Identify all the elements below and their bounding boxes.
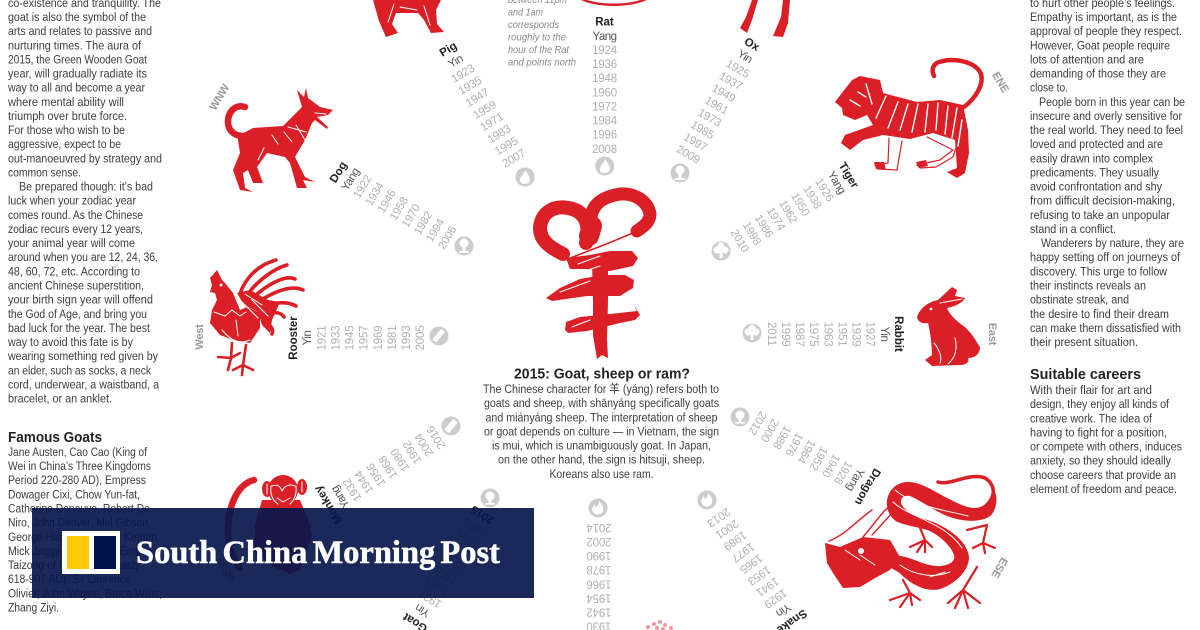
spoke: Monkey: 1932 [341,476,365,503]
spoke: Goat: 1931 [417,586,444,610]
text block: suitable careers: creative work. The idea of [1030,411,1152,425]
right column: personality text: predicaments. They usually [1030,165,1160,179]
icon: wood element, Tiger [712,242,730,260]
icon: metal element, Rooster [430,326,448,346]
spoke: Pig: 1971 [478,111,506,134]
spoke: Rat: Rat [595,17,614,29]
spoke: Tiger: 1998 [740,220,763,247]
right column: personality text: close to. [1030,81,1068,95]
right column: personality text: lots of attention and are [1030,52,1144,66]
note: hour of the Rat [508,0,576,68]
spoke: Tiger: 1974 [764,205,787,234]
spoke: Ox: 1973 [695,107,723,130]
spoke: Goat: 2003 [462,515,489,538]
spoke: Rooster: 1933 [330,326,342,350]
spoke: Horse [583,521,615,630]
text block: famous goats list [8,445,162,614]
left column: goat year text: cord, underwear, a waistband, a [8,377,159,391]
left column: goat year text: 48, 60, 72, etc. According to [8,264,140,278]
icon: earth element, Goat [480,488,500,508]
spoke: Dog: 1934 [364,180,387,208]
text block: suitable careers: anxiety, so they should ideally [1030,454,1172,468]
note: hour of the Rat: corresponds [508,19,560,31]
spoke: Rabbit: 1939 [850,322,862,346]
spoke: Pig: 1959 [471,99,499,122]
spoke: Rat: 1972 [592,102,617,114]
spoke: Rat: 1960 [592,87,617,99]
spoke: Goat [401,502,497,630]
spoke: Horse: 1990 [587,549,611,561]
icon: fire element, Snake [698,490,716,510]
spoke: Dog: Yang [340,166,362,193]
spoke: Dragon: 1928 [831,459,854,486]
spoke: Pig: Pig [438,40,459,60]
spoke: Monkey: 1968 [377,453,400,481]
right column: personality text: happy setting off on journeys of [1030,250,1180,264]
left column: goat year text: ancient Chinese superstition, [8,278,144,292]
spoke: Tiger [727,160,861,257]
text block: suitable careers: With their flair for art and [1030,383,1152,397]
spoke: Rabbit [765,316,904,352]
animal: Rooster [210,260,303,375]
left column: goat year text: comes round. As the Chinese [8,208,143,222]
animal: Pig [373,0,444,37]
spoke: Snake: 2013 [705,505,732,529]
spoke: Snake: 1953 [745,563,773,587]
left column: goat year text: year, will gradually radiate its [8,66,147,80]
spoke: Snake: 1929 [762,586,789,610]
left column: goat year text: For those who wish to be [8,123,125,137]
spoke: Monkey: Monkey [312,483,345,526]
spoke: Dog: 2006 [436,224,459,252]
spoke: Snake: 1965 [737,551,764,575]
spoke: Rat [592,17,618,156]
text block: famous goats list: Jane Austen, Cao Cao (King of [8,445,147,459]
animal: Rabbit [917,287,980,366]
spoke: Snake: 1941 [754,574,781,598]
icon: wood element, Rabbit [742,324,762,342]
icon: water element, Rat [595,156,614,176]
spoke: Dragon: 2012 [746,409,768,437]
left column: goat year text: luck when your zodiac year [8,194,136,208]
spoke: Tiger: 1926 [812,176,835,204]
spoke: Tiger: 1962 [776,198,799,226]
spoke: Rooster: 1993 [401,326,413,350]
left column: goat year text: around when you are 12, 24, 36, [8,250,158,264]
spoke: Rooster: 1969 [373,326,385,350]
spoke: Dragon: 1952 [807,445,830,472]
compass: West: West [194,324,206,350]
spoke: Pig: Yin [446,53,465,71]
spoke: Goat: 1955 [432,563,459,586]
animal: Monkey [228,475,312,574]
spoke: Ox: 1997 [681,131,709,154]
text block: character explanation: is mui, which is unambiguously goat. In Japan, [492,438,711,452]
spoke: Rabbit: Rabbit [892,316,904,352]
right column: personality text: Empathy is important, as is the [1030,10,1177,24]
wordmark: South China Morning Post [136,535,500,571]
left column: goat year text: arts and relates to passive and [8,24,152,38]
spoke: Ox: 1937 [717,70,744,93]
note: hour of the Rat: hour of the Rat [508,44,570,56]
spoke: Dragon: 1940 [819,452,842,479]
logo [62,531,120,574]
right column: personality text: avoid confrontation and shy [1030,180,1163,194]
compass: ENE: ENE [989,70,1011,95]
icon: metal element, Monkey [442,416,460,436]
spoke: Dragon: Yang [844,466,866,493]
spoke: Ox [674,33,765,166]
text block: famous goats list: Mick Jagger, Li Shimin (Emperor [8,544,160,558]
note: hour of the Rat: and 1am [508,6,543,18]
spoke: Tiger: Tiger [836,160,861,191]
spoke: Horse: 1954 [586,592,611,604]
left column: goat year text: bad luck for the year. The best [8,321,150,335]
left column: goat year text: zodiac recurs every 12 years, [8,222,143,236]
right column: personality text: easily drawn into complex [1030,151,1154,165]
spoke: Snake: Yin [774,600,793,619]
spoke: Rat: 1984 [592,116,618,128]
compass: ESE: ESE [989,555,1010,580]
heading: Suitable careers: Suitable careers [1030,367,1141,383]
icon: earth element, Dragon [730,408,750,426]
text block: suitable careers: having to fight for a position, [1030,425,1167,439]
right column: personality text: their present situation. [1030,335,1138,349]
icon: water element, Pig [516,168,534,186]
spoke: Dragon: 1988 [770,423,793,451]
left column: goat year text: bracelet, or an anklet. [8,392,112,406]
spoke: Dragon: 1976 [782,430,805,458]
left column: goat year text: aggressive, expect to be [8,137,121,151]
text block: famous goats list: Olivier, John Wayne, Bruce Willis, [8,586,162,600]
text block: famous goats list: George Harrison, Buster Keaton, [8,530,160,544]
spoke: Ox: 1949 [710,82,737,105]
right column: personality text: loved and protected and are [1030,137,1163,151]
spoke: Ox: Ox [742,36,762,54]
animal: Horse fragment [646,620,673,630]
spoke: Horse: 1978 [587,563,611,575]
left column: goat year text: wearing something red given by [7,349,159,363]
spoke: Monkey: 1980 [389,446,412,473]
spoke: Rooster: 1981 [387,326,399,350]
text block: suitable careers: or compete with others, induces [1030,440,1182,454]
right column: personality text: can make them dissatisfied with [1030,321,1181,335]
spoke: Pig: 2007 [500,147,528,170]
spoke: Rabbit: 1963 [821,322,833,346]
text block: suitable careers: choose careers that provide an [1030,468,1176,482]
spoke: Goat: 1943 [424,575,452,598]
spoke: Rooster: 1945 [344,326,356,350]
spoke: Ox: 2009 [674,144,702,166]
banner: South China Morning Post [32,508,534,598]
spoke: Ox: 1961 [702,95,730,117]
right column: personality text: demanding of those they are [1030,66,1166,80]
left column: goat year text: 2015, the Green Wooden Goat [8,52,147,66]
icon: earth element, Ox [670,164,690,182]
spoke: Rat: 1924 [592,45,618,57]
spoke: Rooster: Rooster [288,316,300,360]
spoke: Rooster: 2005 [415,326,427,350]
icon: earth element, Dog [454,236,474,256]
spoke: Tiger: 1938 [800,184,823,211]
spoke: Snake: 1977 [729,540,756,564]
text block: suitable careers: design, they enjoy all kinds of [1030,397,1169,411]
left column: goat year text: nurturing times. The aura of [8,38,141,52]
spoke: Dog: 1922 [352,173,375,201]
right column: personality text: from difficult decision-making, [1030,194,1175,208]
text block: character explanation: The Chinese character for 羊 (yáng) refers both to [483,381,719,396]
spoke: Rat: 1996 [592,130,617,142]
spoke: Rat: 2008 [592,144,617,156]
left column: goat year text: your birth sign year will offend [8,293,153,307]
right column: personality text [1030,0,1185,349]
spoke: Rooster: Yin [302,331,314,345]
note: hour of the Rat: roughly to the [508,31,566,43]
text block: character explanation: and miányáng sheep. The interpretation of sheep [486,410,718,424]
compass: WSW: WSW [214,554,239,584]
spoke: Dog: Dog [328,160,350,185]
text block: character explanation [483,381,719,481]
spoke: Horse: 2014 [586,521,611,533]
spoke: Tiger: Yang [825,169,847,196]
spoke: Pig [435,38,528,170]
spoke: Rooster: 1921 [316,326,328,350]
right column: personality text: refusing to take an unpopular [1030,208,1170,222]
spoke: Pig: 1923 [449,63,477,86]
left column: goat year text [7,0,162,406]
spoke: Pig: 1947 [464,87,491,110]
spoke: Dog: 1970 [400,202,423,230]
spoke: Monkey: Yang [329,484,352,510]
spoke: Horse: 1942 [587,606,611,618]
spoke: Dog: 1982 [412,210,435,237]
compass: East: East [986,323,998,346]
spoke: Goat: 1967 [439,551,467,574]
note: hour of the Rat: and points north [508,56,576,68]
spoke: Monkey: 1944 [353,468,376,496]
left column: goat year text: your animal year will come [8,236,135,250]
text block: character explanation: or goat depends on culture — in Vietnam, the sign [484,424,719,438]
text block: famous goats list: Wei in China’s Three Kingdoms [8,459,151,473]
animal: Ox [740,0,790,37]
spoke: Rat: 1936 [592,59,617,71]
spoke: Goat: 1991 [454,527,482,550]
spoke: Dog: 1958 [388,195,411,223]
left column: goat year text: out-manoeuvred by strategy and [8,151,162,165]
spoke: Ox: 1925 [724,58,751,81]
spoke: Snake [701,502,809,630]
spoke: Monkey [312,415,453,526]
text block: character explanation: Koreans also use ram. [550,467,654,481]
compass: WNW: WNW [207,82,233,113]
left column: goat year text: triumph over brute force. [8,109,127,123]
spoke: Rat: 1948 [592,73,617,85]
left column: goat year text: the God of Age, and bring you [8,307,147,321]
spoke: Monkey: 1992 [401,438,424,466]
spoke: Rabbit: 1999 [779,322,791,346]
animal: Tiger [835,60,982,178]
spoke: Tiger: 1950 [788,191,811,218]
right column: personality text: the desire to find their dream [1030,307,1169,321]
spoke: Rabbit: 2011 [765,322,777,346]
animal: Dog [228,88,333,192]
text block: famous goats list: Zhang Ziyi. [8,600,59,614]
spoke: Rabbit: 1951 [836,322,848,346]
spoke: Monkey: 2016 [425,423,448,451]
spoke: Goat: 2015 [469,502,497,526]
spoke: Ox: Yin [735,48,754,66]
spoke: Dragon: 2000 [758,416,781,444]
text block: famous goats list: Catherine Deneuve, Robert De [8,502,150,516]
spoke: Tiger: 1986 [752,213,775,240]
spoke: Dog: 1994 [424,216,448,244]
spoke: Dragon [742,402,882,507]
text block: suitable careers [1030,383,1182,496]
spoke: Snake: 1989 [721,528,748,552]
spoke: Goat: Yin [414,601,432,619]
left column: goat year text: an elder, such as socks, a neck [8,363,152,377]
spoke: Rooster [288,316,427,360]
text block: famous goats list: Period 220-280 AD), Empress [8,473,146,487]
animal: Rat [580,0,648,5]
spoke: Goat: 1979 [447,539,474,562]
spoke: Snake: 2001 [713,517,740,541]
right column: personality text: stand in a conflict. [1030,222,1116,236]
spoke: Dragon: Dragon [852,466,882,507]
text block: famous goats list: Taizong of the Tang Dynasty [8,558,141,572]
spoke: Monkey: 2004 [413,430,436,458]
left column: goat year text: way to all and become a year [7,81,145,95]
spoke: Dog: 1946 [376,188,399,215]
left column: goat year text: goat is also the symbol of the [8,10,146,24]
text block: character explanation: goats and sheep, with shānyáng specifically goats [484,396,719,410]
right column: personality text: However, Goat people require [1030,38,1170,52]
heading: Famous Goats: Famous Goats [8,430,102,446]
spoke: Dragon: 1964 [794,437,817,466]
spoke: Rat: Yang [592,31,617,43]
calligraphy: yang character [540,194,650,359]
spoke: Monkey: 1956 [365,461,388,488]
spoke: Tiger: 2010 [728,227,751,255]
spoke: Pig: 1983 [486,123,513,146]
spoke: Pig: 1995 [493,135,520,158]
left column: goat year text: where mental ability will [7,95,124,109]
text block: famous goats list: 618-907 AD), Sir Laurence [8,572,131,586]
text block: famous goats list: Dowager Cixi, Chow Yun-fat, [8,487,140,501]
spoke: Rabbit: 1975 [807,322,819,346]
right column: personality text: obstinate streak, and [1030,293,1129,307]
text block: suitable careers: element of freedom and peace. [1030,482,1177,496]
right column: personality text: discovery. This urge to follow [1030,264,1167,278]
right column: personality text: their instincts reveals an [1030,278,1146,292]
text block: character explanation: on the other hand, the sign is hitsuji, sheep. [498,453,705,467]
spoke: Rabbit: 1927 [864,322,876,346]
spoke: Rabbit: Yin [878,327,890,341]
icon: fire element, Horse [588,498,608,518]
left column: goat year text: common sense. [8,165,81,179]
left column: goat year text: Be prepared though: it’s bad [19,180,153,194]
spoke: Rabbit: 1987 [793,322,805,346]
spoke: Horse: 1966 [587,577,611,589]
left column: goat year text: way to avoid this fate is by [7,335,134,349]
text block: famous goats list: Niro, John Denver, Mel Gibson, [8,516,151,530]
spoke: Ox: 1985 [688,119,716,142]
heading: 2015 Goat, sheep or ram: 2015: Goat, sheep or ram? [514,366,690,382]
spoke: Horse: 2002 [587,535,611,547]
spoke: Rooster: 1957 [359,326,371,350]
animal: Dragon [825,476,995,608]
spoke: Dog [327,158,460,252]
spoke: Pig: 1935 [457,75,484,98]
